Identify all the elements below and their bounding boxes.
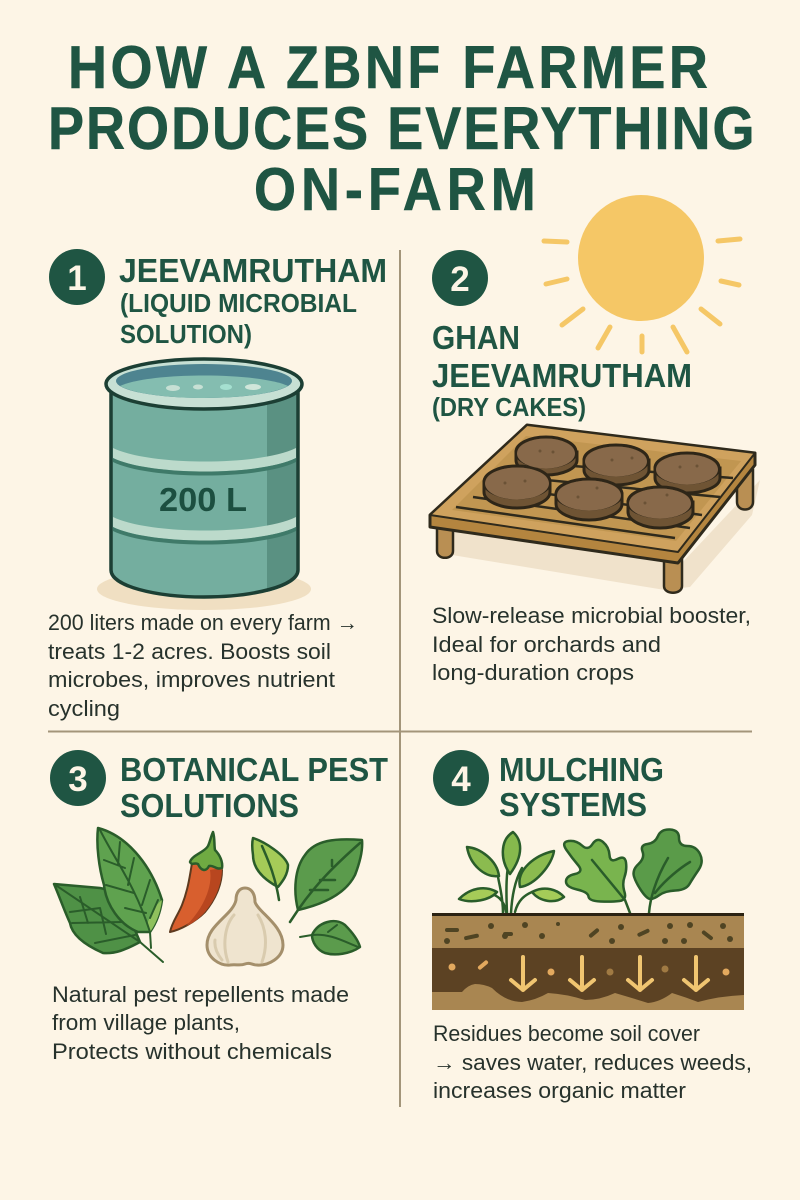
number badge 3: 3 <box>68 760 88 799</box>
icon: 200 litre barrel <box>97 359 311 610</box>
text: jeevamrutham description: treats 1-2 acres. Boosts soil <box>48 639 331 664</box>
text: botanical description: Natural pest repellents made <box>52 982 349 1007</box>
panel: mulching systems <box>432 750 752 1103</box>
icon: pest repellent plants <box>54 828 362 965</box>
panel: botanical pest solutions <box>50 750 388 1064</box>
leaf light <box>252 838 288 887</box>
heading: mulching systems: SYSTEMS <box>499 786 647 823</box>
icon: 200 litre barrel: 200 L <box>159 481 247 518</box>
number badge 1: 1 <box>67 259 87 298</box>
text: ghan jeevamrutham description: Ideal for orchards and <box>432 632 661 657</box>
title: HOW A ZBNF FARMER <box>68 34 708 102</box>
heading: mulching systems: MULCHING <box>499 751 664 788</box>
title: ON-FARM <box>254 156 536 224</box>
title: PRODUCES EVERYTHING <box>48 95 755 163</box>
text: botanical description <box>52 982 349 1064</box>
text: botanical description: Protects without chemicals <box>52 1039 332 1064</box>
text: botanical description: from village plants, <box>52 1010 240 1035</box>
number badge 2: 2 <box>450 260 470 299</box>
icon: soil layers with water arrows <box>432 914 744 1010</box>
leaf dark <box>295 839 362 910</box>
leaf small <box>312 921 360 954</box>
heading: botanical pest solutions: BOTANICAL PEST <box>120 751 388 788</box>
title <box>48 34 755 224</box>
text: jeevamrutham description <box>48 610 358 721</box>
heading: jeevamrutham <box>119 252 387 349</box>
heading: mulching systems <box>499 751 664 823</box>
text: ghan jeevamrutham description <box>432 603 751 685</box>
number badge 3 <box>50 750 106 806</box>
icon: drying rack with cakes <box>430 425 760 593</box>
number badge 4: 4 <box>451 760 471 799</box>
panel: ghan jeevamrutham <box>430 195 760 685</box>
text: mulching description: → saves water, reduces weeds, <box>433 1050 752 1075</box>
icon: sun <box>544 195 740 352</box>
text: mulching description: increases organic matter <box>433 1078 686 1103</box>
heading: ghan jeevamrutham: JEEVAMRUTHAM <box>432 357 692 394</box>
garlic <box>207 888 283 965</box>
chili <box>170 861 222 932</box>
heading: ghan jeevamrutham: (DRY CAKES) <box>432 392 586 422</box>
text: jeevamrutham description: 200 liters made on every farm → <box>48 610 358 635</box>
number badge 4 <box>433 750 489 806</box>
heading: botanical pest solutions: SOLUTIONS <box>120 787 299 824</box>
heading: ghan jeevamrutham: GHAN <box>432 319 520 356</box>
number badge 2 <box>432 250 488 306</box>
heading: jeevamrutham: JEEVAMRUTHAM <box>119 252 387 289</box>
heading: jeevamrutham: (LIQUID MICROBIAL <box>120 288 357 318</box>
text: mulching description <box>433 1021 752 1103</box>
number badge 1 <box>49 249 105 305</box>
text: ghan jeevamrutham description: long-duration crops <box>432 660 634 685</box>
text: jeevamrutham description: microbes, improves nutrient <box>48 667 335 692</box>
icon: plants above soil <box>459 829 702 913</box>
heading: botanical pest solutions <box>120 751 388 824</box>
text: ghan jeevamrutham description: Slow-release microbial booster, <box>432 603 751 628</box>
text: mulching description: Residues become soil cover <box>433 1021 700 1046</box>
panel: jeevamrutham <box>48 249 387 721</box>
heading: jeevamrutham: SOLUTION) <box>120 319 252 349</box>
heading: ghan jeevamrutham <box>432 319 692 422</box>
text: jeevamrutham description: cycling <box>48 696 120 721</box>
